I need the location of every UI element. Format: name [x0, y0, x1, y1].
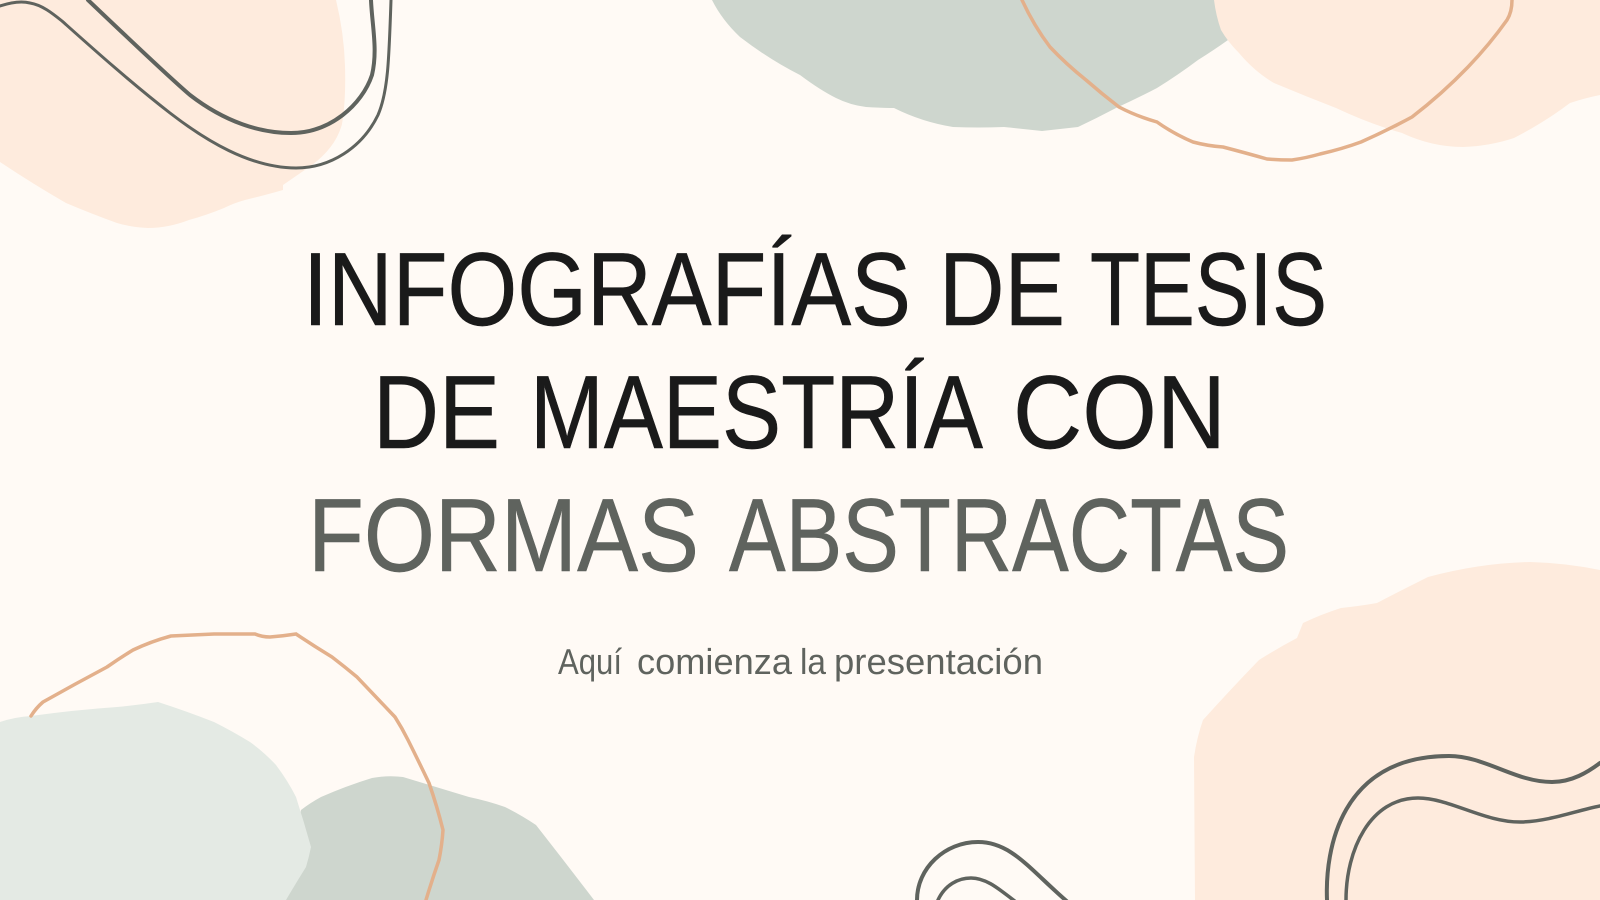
- line: thin curve: [0, 0, 391, 168]
- title line 1: DE: [939, 232, 1065, 348]
- subtitle: Aquí: [558, 641, 622, 682]
- subtitle: [558, 641, 1043, 682]
- title line 3: FORMAS: [308, 478, 699, 594]
- title line 3: [308, 478, 1289, 594]
- title line 2: [373, 355, 1226, 471]
- line: top orange contour: [1022, 0, 1512, 160]
- title line 1: TESIS: [1090, 232, 1327, 348]
- line: bottom-left orange contour: [31, 634, 443, 900]
- subtitle: la: [800, 641, 827, 682]
- title: [303, 232, 1327, 594]
- line: thin curve: [938, 878, 1016, 900]
- blob: top-right peach: [1214, 0, 1600, 147]
- title line 1: [303, 232, 1327, 348]
- subtitle: comienza: [637, 641, 793, 682]
- blob: bottom-left light sage: [0, 702, 311, 900]
- title line 2: MAESTRÍA: [530, 355, 984, 471]
- group: top-left grey lines: [0, 0, 391, 168]
- title line 2: CON: [1013, 355, 1226, 471]
- title line 1: INFOGRAFÍAS: [303, 232, 911, 348]
- blob: bottom-right peach: [1194, 562, 1600, 900]
- subtitle: presentación: [834, 641, 1043, 682]
- group: bottom-right grey lines: [1327, 756, 1600, 900]
- blob: bottom-left dark sage: [286, 776, 594, 900]
- line: thick curve: [88, 0, 375, 133]
- group: bottom-centre grey lines: [917, 842, 1070, 900]
- line: thick curve: [1327, 756, 1600, 900]
- blob: top-left peach: [0, 0, 345, 228]
- line: thin curve: [1346, 798, 1600, 900]
- title line 3: ABSTRACTAS: [729, 478, 1289, 594]
- line: thick curve: [917, 842, 1070, 900]
- blob: top centre sage: [712, 0, 1240, 131]
- title line 2: DE: [373, 355, 500, 471]
